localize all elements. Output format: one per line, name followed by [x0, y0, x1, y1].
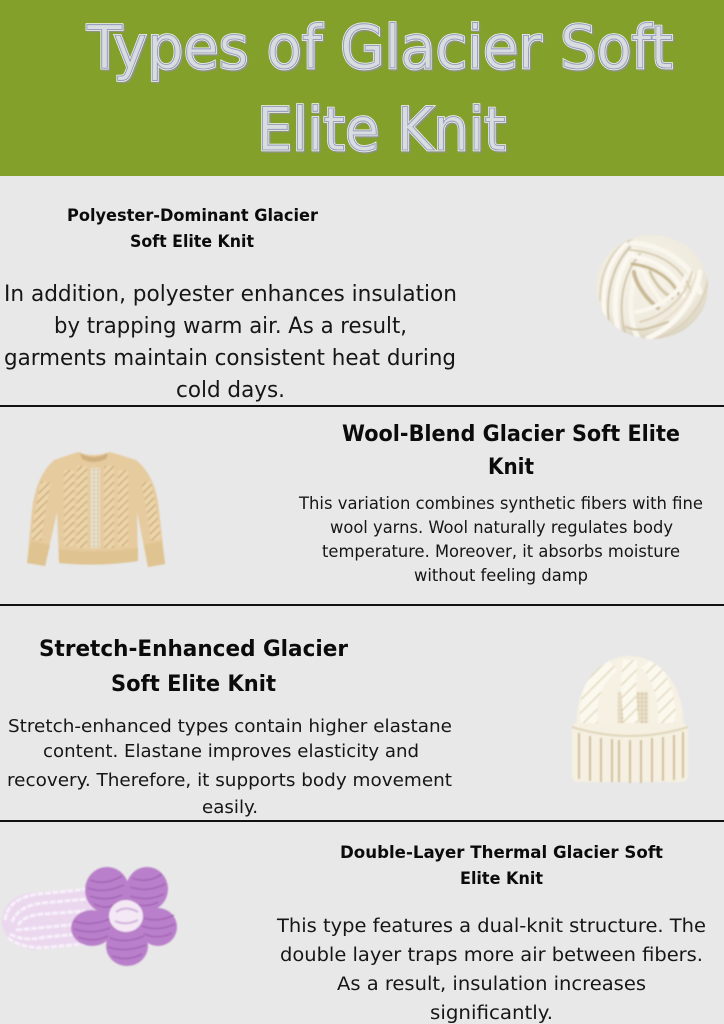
text block: wool-blend: [298, 494, 703, 585]
heading: wool-blend: [342, 421, 680, 480]
text block: wool-blend: temperature. Moreover, it absorbs moisture: [322, 542, 680, 561]
text block: stretch-enhanced: recovery. Therefore, it supports body movement: [7, 770, 452, 791]
heading: wool-blend: Knit: [488, 454, 534, 480]
panel: wool-blend: [27, 421, 703, 585]
panel: polyester-dominant: [4, 206, 708, 403]
title: Types of Glacier Soft: [86, 13, 673, 83]
text block: wool-blend: without feeling damp: [414, 566, 588, 585]
divider: [0, 820, 724, 822]
heading: stretch-enhanced: Stretch-Enhanced Glacier: [39, 636, 349, 662]
text block: polyester-dominant: [4, 282, 457, 403]
heading: polyester-dominant: [67, 206, 319, 252]
text block: polyester-dominant: by trapping warm air. As a result,: [54, 314, 407, 339]
title: Elite Knit: [257, 95, 506, 165]
heading: wool-blend: Wool-Blend Glacier Soft Elite: [342, 421, 680, 447]
title: Elite Knit: [257, 95, 506, 165]
icon: yarn ball: [596, 235, 708, 339]
heading: polyester-dominant: Soft Elite Knit: [130, 232, 254, 252]
heading: stretch-enhanced: [39, 636, 349, 697]
text block: stretch-enhanced: Stretch-enhanced types contain higher elastane: [8, 716, 452, 737]
panel: stretch-enhanced: [7, 636, 688, 818]
icon: cable-knit sweater: [27, 452, 165, 567]
icon: crochet flower hair clip: [2, 867, 177, 966]
text block: polyester-dominant: cold days.: [176, 378, 285, 403]
divider: [0, 405, 724, 407]
header banner: [0, 0, 724, 176]
text block: wool-blend: wool yarns. Wool naturally regulates body: [330, 518, 673, 537]
heading: double-layer thermal: Double-Layer Thermal Glacier Soft: [340, 843, 663, 862]
heading: polyester-dominant: Polyester-Dominant Glacier: [67, 206, 319, 226]
text block: stretch-enhanced: content. Elastane improves elasticity and: [43, 741, 419, 762]
text block: polyester-dominant: garments maintain consistent heat during: [4, 346, 456, 371]
text block: stretch-enhanced: easily.: [202, 797, 258, 818]
icon: cable-knit beanie: [572, 656, 688, 783]
title: Types of Glacier Soft: [86, 13, 673, 83]
text block: double-layer thermal: significantly.: [430, 1003, 553, 1024]
text block: double-layer thermal: double layer traps more air between fibers.: [280, 945, 703, 966]
divider: [0, 604, 724, 606]
text block: stretch-enhanced: [7, 716, 452, 818]
heading: double-layer thermal: Elite Knit: [460, 869, 543, 888]
heading: double-layer thermal: [340, 843, 663, 888]
heading: stretch-enhanced: Soft Elite Knit: [111, 671, 276, 697]
text block: double-layer thermal: This type features a dual-knit structure. The: [276, 916, 706, 937]
panel: double-layer thermal: [2, 843, 706, 1024]
text block: double-layer thermal: As a result, insulation increases: [337, 974, 646, 995]
title: [86, 13, 675, 166]
text block: double-layer thermal: [276, 916, 706, 1024]
text block: polyester-dominant: In addition, polyester enhances insulation: [4, 282, 457, 307]
text block: wool-blend: This variation combines synthetic fibers with fine: [298, 494, 703, 513]
title: Types of Glacier Soft: [88, 14, 675, 84]
title: Elite Knit: [258, 96, 508, 166]
